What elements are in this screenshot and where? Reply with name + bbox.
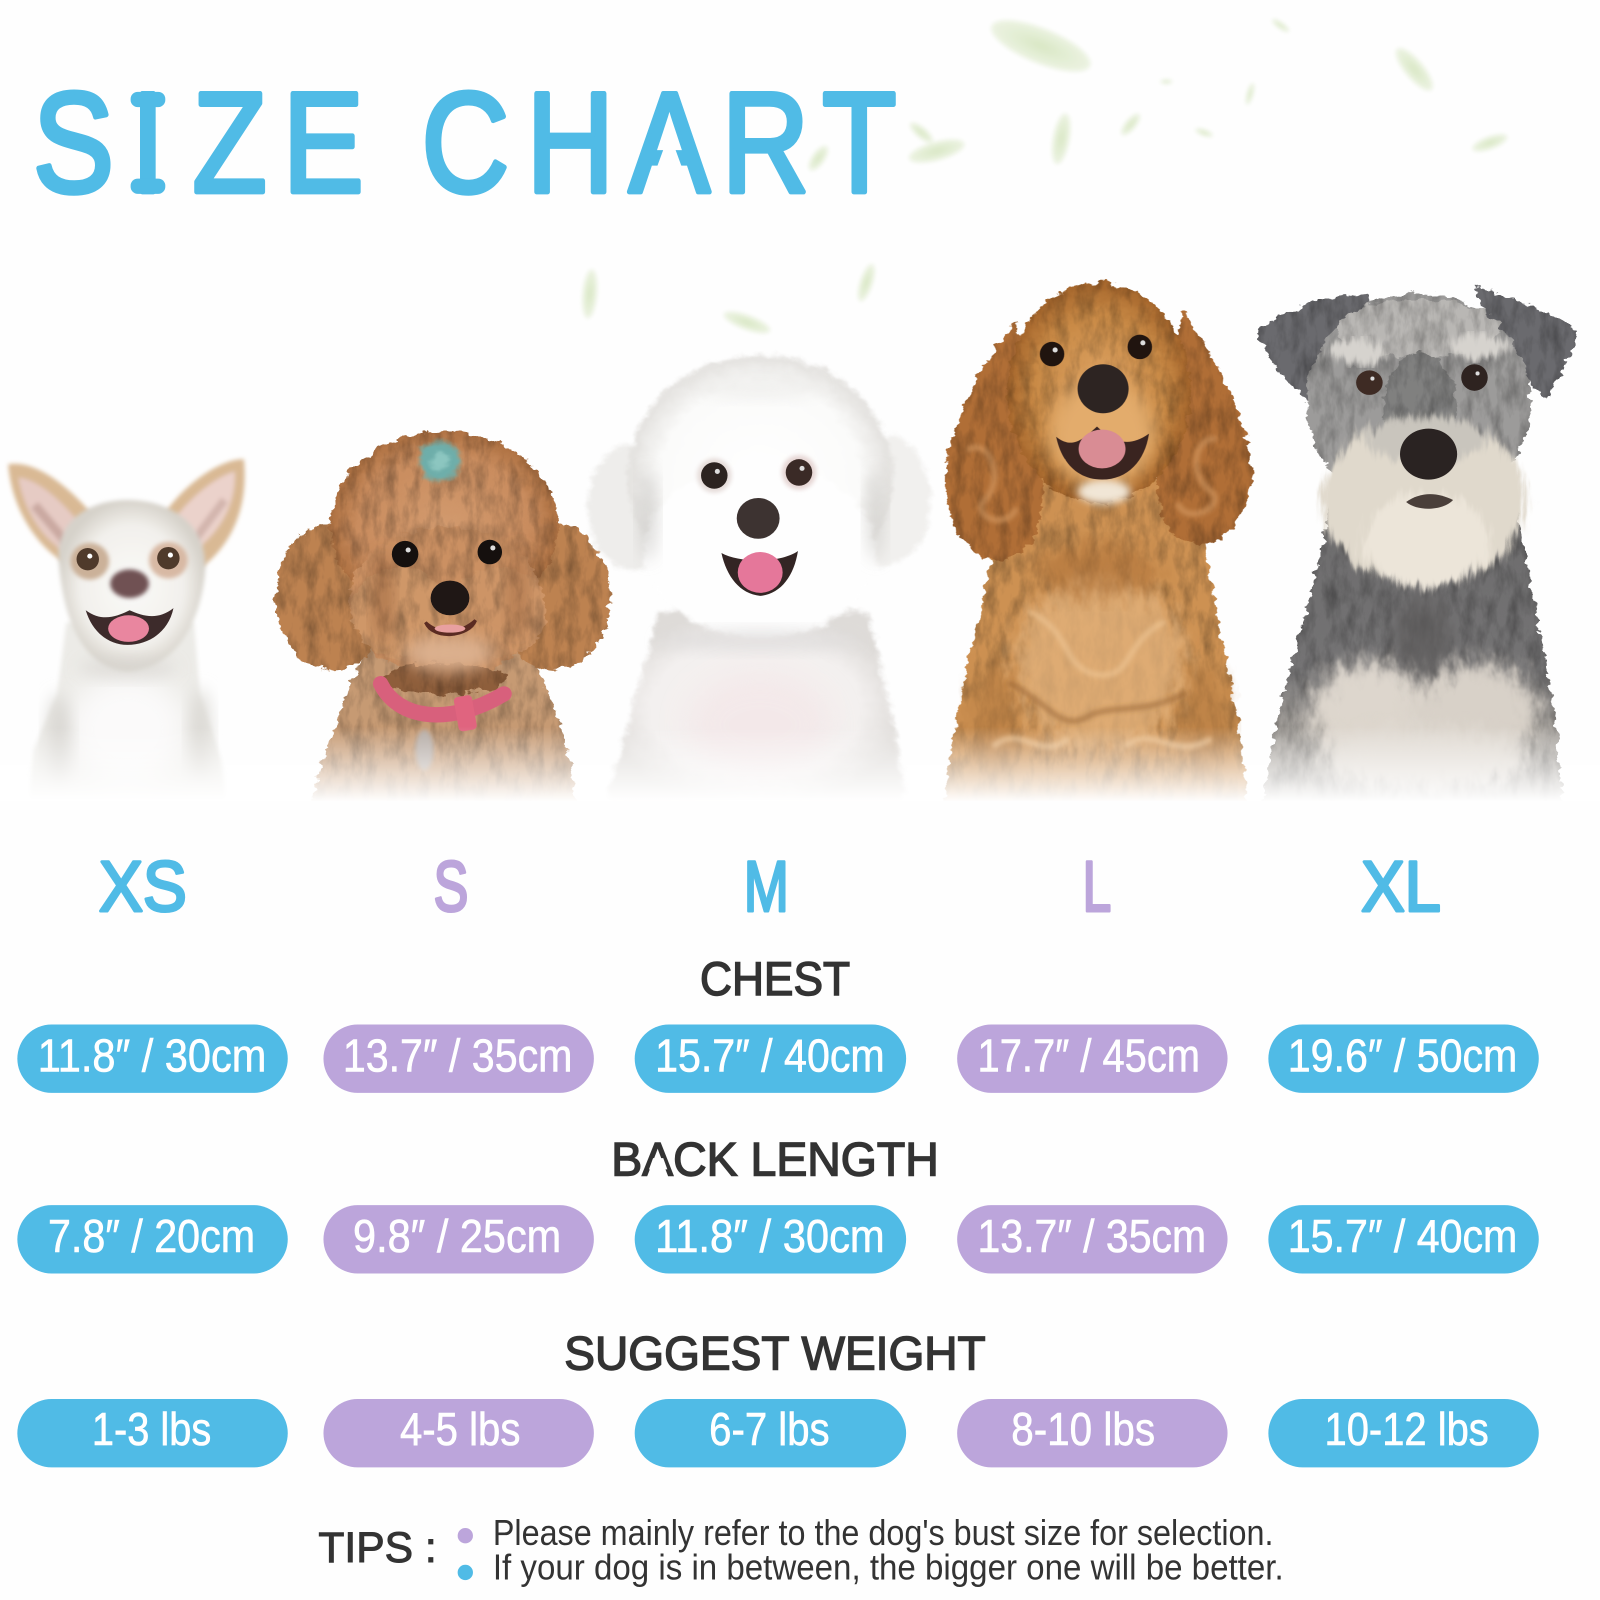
chin highlight bbox=[404, 635, 494, 671]
row: suggested weights: 8-10 lbs bbox=[1011, 1403, 1155, 1455]
beard bbox=[1322, 416, 1527, 588]
tip line 1: Please mainly refer to the dog's bust size for selection. bbox=[493, 1513, 1273, 1553]
row: suggested weights: 1-3 lbs bbox=[92, 1403, 211, 1455]
row: chest sizes: 17.7″ / 45cm bbox=[978, 1029, 1200, 1081]
head bbox=[330, 432, 558, 619]
collar bbox=[381, 684, 504, 770]
head bbox=[1306, 293, 1531, 513]
row: back length sizes: 13.7″ / 35cm bbox=[978, 1210, 1206, 1262]
size M: M bbox=[744, 847, 789, 927]
shading bbox=[640, 378, 884, 776]
row: back length sizes: 9.8″ / 25cm bbox=[353, 1210, 561, 1262]
size S: S bbox=[434, 847, 468, 927]
decorative falling leaves bbox=[581, 10, 1509, 338]
row: back length sizes: 11.8″ / 30cm bbox=[655, 1210, 885, 1262]
size labels bbox=[99, 847, 1441, 927]
tips bbox=[318, 1513, 1284, 1588]
chest fur bbox=[1309, 595, 1538, 793]
body bbox=[311, 643, 577, 806]
size XS: XS bbox=[99, 847, 187, 927]
curl details bbox=[969, 439, 1215, 746]
shading bbox=[373, 551, 392, 643]
row: chest sizes: 19.6″ / 50cm bbox=[1288, 1029, 1517, 1081]
row: back length sizes: 7.8″ / 20cm bbox=[48, 1210, 255, 1262]
tips label: TIPS : bbox=[318, 1524, 437, 1572]
heading: suggest weight: SUGGEST WEIGHT bbox=[564, 1327, 986, 1379]
size L: L bbox=[1083, 847, 1111, 927]
nose and mouth bbox=[1056, 364, 1149, 480]
row: suggested weights: 10-12 lbs bbox=[1324, 1403, 1489, 1455]
row: back length sizes: 15.7″ / 40cm bbox=[1288, 1210, 1517, 1262]
head bbox=[59, 500, 205, 671]
heading: back length: BACK LENGTH bbox=[611, 1134, 939, 1186]
eyebrows bbox=[1327, 335, 1508, 364]
dog: L cocker spaniel bbox=[944, 283, 1251, 806]
dog: XL schnauzer bbox=[1257, 286, 1578, 806]
nose and mouth bbox=[721, 498, 798, 596]
chest highlight bbox=[970, 545, 1229, 786]
ears bbox=[276, 523, 388, 670]
dog: M bichon bbox=[588, 355, 931, 806]
ears bbox=[588, 444, 678, 570]
row: chest sizes bbox=[17, 1024, 1539, 1093]
decorative: serifs and open A bbox=[131, 92, 683, 194]
eyes bbox=[1040, 335, 1152, 366]
eyes bbox=[697, 455, 816, 493]
bottom fade over dogs bbox=[0, 727, 1600, 802]
eyes bbox=[70, 542, 188, 580]
head bbox=[1007, 283, 1191, 503]
title: SIZE CHART bbox=[33, 64, 896, 223]
row: chest sizes: 15.7″ / 40cm bbox=[655, 1029, 885, 1081]
row: chest sizes: 11.8″ / 30cm bbox=[38, 1029, 266, 1081]
bullet: purple bbox=[458, 1528, 473, 1543]
row: suggested weights: 6-7 lbs bbox=[709, 1403, 830, 1455]
ears bbox=[945, 321, 1043, 561]
body bbox=[605, 612, 905, 806]
dog: S toy poodle bbox=[276, 432, 610, 806]
eyes bbox=[392, 540, 502, 567]
row: suggested weights: 4-5 lbs bbox=[400, 1403, 520, 1455]
row: chest sizes: 13.7″ / 35cm bbox=[343, 1029, 572, 1081]
nose and mouth bbox=[1400, 429, 1457, 509]
row: back length sizes bbox=[17, 1205, 1539, 1273]
ears bbox=[8, 459, 245, 569]
muzzle shading bbox=[1049, 381, 1155, 504]
nose and mouth bbox=[86, 569, 173, 645]
bullet: blue bbox=[458, 1565, 473, 1580]
body bbox=[944, 480, 1247, 806]
tip line 2: If your dog is in between, the bigger one will be better. bbox=[493, 1548, 1284, 1588]
head bbox=[628, 355, 893, 600]
ears bbox=[1257, 293, 1367, 403]
row: suggested weights bbox=[17, 1399, 1539, 1467]
eyes bbox=[1356, 364, 1488, 395]
flower bow bbox=[419, 441, 460, 482]
nose and mouth bbox=[426, 581, 476, 635]
size XL: XL bbox=[1361, 847, 1441, 927]
dog: XS chihuahua bbox=[8, 459, 245, 806]
body bbox=[29, 622, 227, 806]
body bbox=[1263, 500, 1563, 806]
heading: chest: CHEST bbox=[700, 953, 850, 1005]
